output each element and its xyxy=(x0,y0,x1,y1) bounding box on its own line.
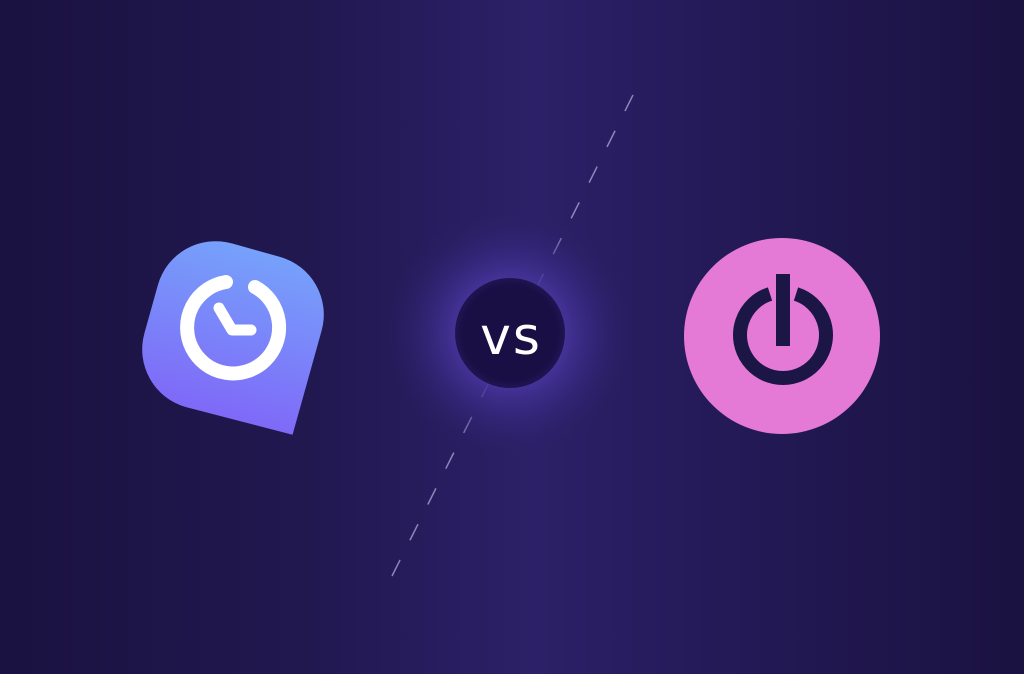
vs badge xyxy=(385,208,635,458)
vs badge: vs xyxy=(480,307,542,367)
dashed divider line xyxy=(385,95,633,590)
icon: clock app (left) xyxy=(128,227,338,437)
icon: power button (right) xyxy=(684,238,880,434)
